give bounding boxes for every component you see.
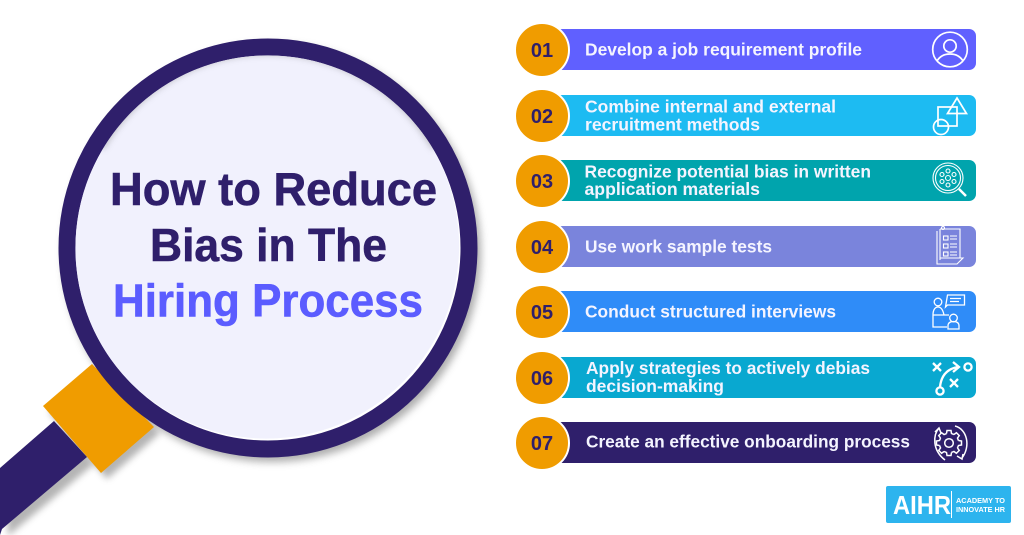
magnifier handle xyxy=(0,421,87,535)
icon: search xyxy=(933,163,966,196)
title: How to Reduce xyxy=(110,163,437,215)
step 1: 01 xyxy=(531,40,553,62)
magnifier collar xyxy=(43,364,154,473)
step 2: Combine internal and external xyxy=(585,97,836,117)
step 5: Conduct structured interviews xyxy=(585,302,836,322)
step 7: 07 xyxy=(531,433,553,455)
step 5: 05 xyxy=(531,302,553,324)
step 3: 03 xyxy=(531,171,553,193)
step 1 xyxy=(515,23,976,77)
step 6 xyxy=(515,351,976,405)
step 2: recruitment methods xyxy=(585,115,760,135)
magnifying glass xyxy=(0,44,481,535)
title xyxy=(110,163,437,326)
step 7: Create an effective onboarding process xyxy=(586,432,910,452)
step 2 xyxy=(515,89,976,143)
icon: strategy xyxy=(933,362,972,395)
logo: AIHR: AIHR xyxy=(893,490,951,520)
title: Hiring Process xyxy=(113,274,423,326)
step 5 xyxy=(515,285,976,339)
icon: shapes xyxy=(934,98,966,134)
step 4: 04 xyxy=(531,237,554,259)
step 1: Develop a job requirement profile xyxy=(585,40,862,60)
step 6: decision-making xyxy=(586,376,724,396)
magnifier lens xyxy=(67,47,469,449)
logo: AIHR: INNOVATE HR xyxy=(956,505,1006,514)
icon: interview xyxy=(933,295,964,329)
icon: person xyxy=(933,32,967,67)
icon: checklist xyxy=(937,226,963,264)
title: Bias in The xyxy=(150,219,387,271)
step 4: Use work sample tests xyxy=(585,236,772,256)
logo: AIHR xyxy=(886,486,1011,523)
step 4 xyxy=(515,220,976,274)
step 6: 06 xyxy=(531,368,553,390)
step 6: Apply strategies to actively debias xyxy=(586,358,870,378)
icon: gear xyxy=(935,426,967,460)
step 3: Recognize potential bias in written xyxy=(584,161,871,181)
logo: AIHR: ACADEMY TO xyxy=(956,496,1005,505)
step 7 xyxy=(515,416,976,470)
step 2: 02 xyxy=(531,106,553,128)
step 3 xyxy=(515,154,976,208)
step 3: application materials xyxy=(584,179,760,199)
